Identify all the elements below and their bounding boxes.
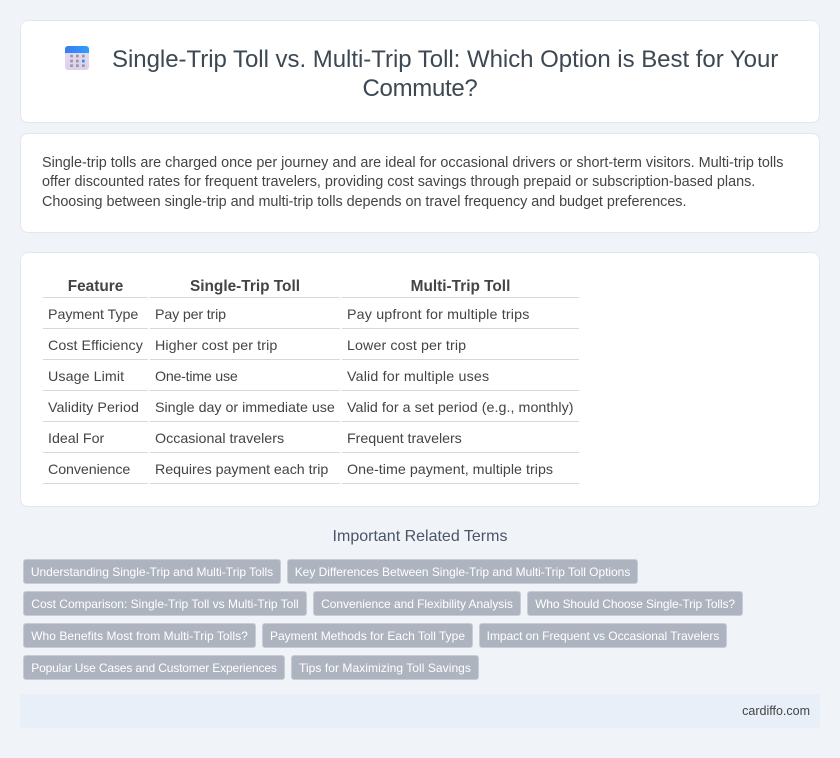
- table: toll comparison: One-time use: [155, 369, 238, 385]
- table: toll comparison: Pay upfront for multiple trips: [347, 307, 530, 323]
- table: toll comparison: Validity Period: [48, 400, 139, 416]
- panel: related term tags: Tips for Maximizing Toll Savings: [299, 661, 471, 675]
- table: toll comparison: Ideal For: [48, 431, 104, 447]
- panel: related term tags: Key Differences Between Single-Trip and Multi-Trip Toll Options: [295, 565, 630, 579]
- title: [112, 46, 778, 102]
- panel: related term tags: Payment Methods for Each Toll Type: [270, 629, 465, 643]
- table: toll comparison: Feature: [68, 278, 123, 295]
- table: toll comparison: Payment Type: [48, 307, 138, 323]
- table: toll comparison: Usage Limit: [48, 369, 124, 385]
- table: toll comparison: [43, 278, 579, 484]
- icon: calendar: [65, 46, 89, 70]
- table: toll comparison: Convenience: [48, 462, 130, 478]
- text block: summary: [42, 155, 783, 210]
- title: Commute?: [362, 75, 477, 102]
- table: toll comparison: Valid for multiple uses: [347, 369, 489, 385]
- panel: related term tags: Cost Comparison: Single-Trip Toll vs Multi-Trip Toll: [31, 597, 299, 611]
- table: toll comparison: One-time payment, multiple trips: [347, 462, 553, 478]
- table: toll comparison: Lower cost per trip: [347, 338, 466, 354]
- panel: related term tags: Who Should Choose Single-Trip Tolls?: [535, 597, 735, 611]
- table: toll comparison: Valid for a set period (e.g., monthly): [347, 400, 574, 416]
- table: toll comparison: Single day or immediate use: [155, 400, 335, 416]
- title: Single-Trip Toll vs. Multi-Trip Toll: Which Option is Best for Your: [112, 46, 778, 73]
- table: toll comparison: Single-Trip Toll: [190, 278, 300, 295]
- text: site credit: cardiffo.com: [742, 704, 810, 718]
- text block: summary: offer discounted rates for frequent travelers, providing cost savings through prepaid or subscription-based plans.: [42, 174, 755, 190]
- table: toll comparison: Occasional travelers: [155, 431, 284, 447]
- table: toll comparison: Frequent travelers: [347, 431, 462, 447]
- table: toll comparison: Requires payment each trip: [155, 462, 328, 478]
- panel: summary paragraph: [20, 133, 820, 233]
- table: toll comparison: Higher cost per trip: [155, 338, 277, 354]
- heading: related terms: Important Related Terms: [333, 528, 507, 545]
- panel: comparison table: [20, 252, 820, 507]
- panel: header: [20, 20, 820, 123]
- panel: related term tags: Convenience and Flexibility Analysis: [321, 597, 513, 611]
- panel: related term tags: [23, 559, 743, 680]
- panel: related term tags: Understanding Single-Trip and Multi-Trip Tolls: [31, 565, 273, 579]
- text block: summary: Single-trip tolls are charged once per journey and are ideal for occasional drivers or short-term visitors. Multi-trip tolls: [42, 155, 783, 171]
- table: toll comparison: Multi-Trip Toll: [411, 278, 510, 295]
- table: toll comparison: Cost Efficiency: [48, 338, 143, 354]
- text block: summary: Choosing between single-trip and multi-trip tolls depends on travel frequency and budget preferences.: [42, 194, 686, 210]
- panel: related term tags: Impact on Frequent vs Occasional Travelers: [487, 629, 719, 643]
- panel: footer: [20, 694, 820, 728]
- panel: related term tags: Popular Use Cases and Customer Experiences: [31, 661, 277, 675]
- panel: related term tags: Who Benefits Most from Multi-Trip Tolls?: [31, 629, 248, 643]
- table: toll comparison: Pay per trip: [155, 307, 226, 323]
